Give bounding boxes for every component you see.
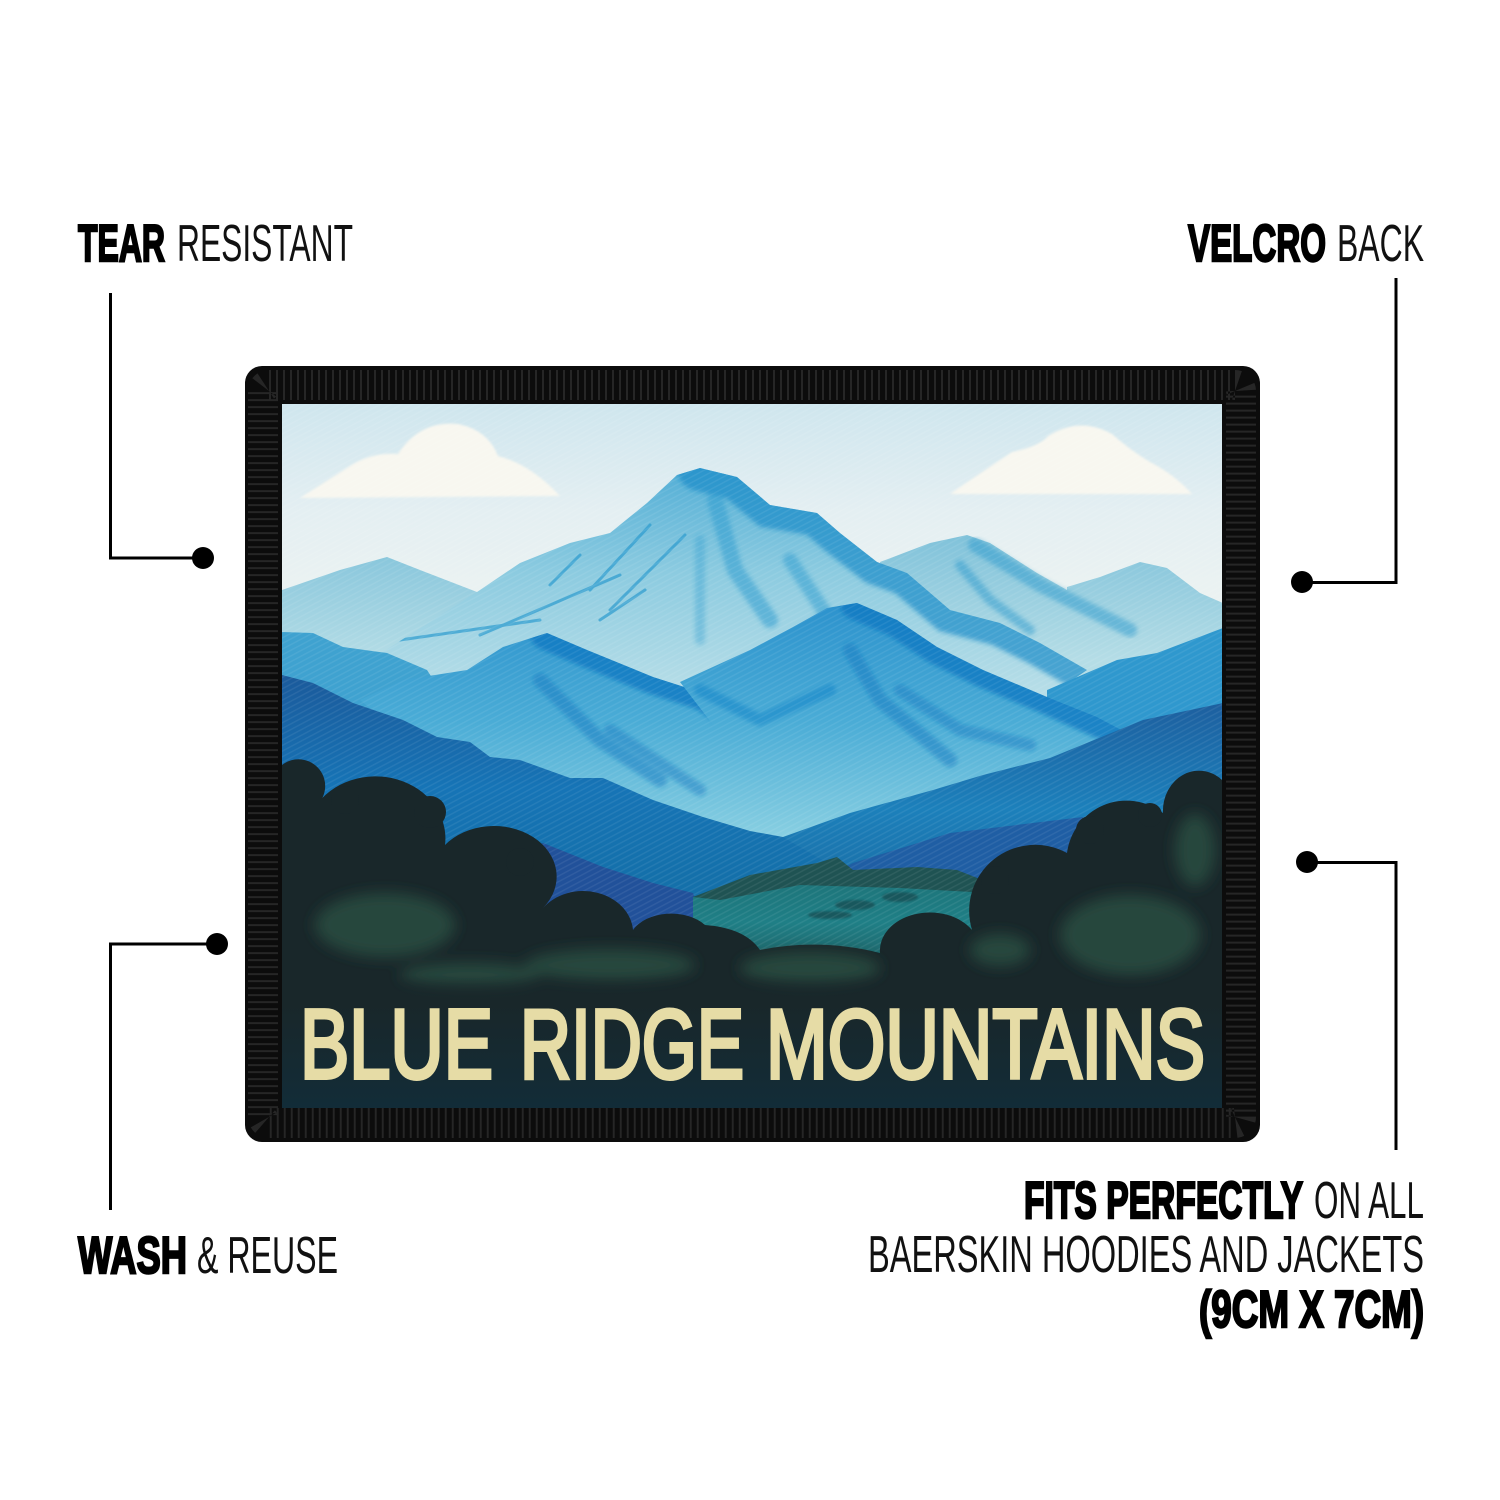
cloud right bbox=[950, 425, 1192, 494]
patch bbox=[245, 366, 1260, 1142]
label: FITS PERFECTLY bbox=[1024, 1172, 1303, 1230]
patch title: BLUE bbox=[300, 989, 493, 1099]
leader line bbox=[1302, 278, 1396, 582]
label: VELCRO bbox=[1188, 215, 1326, 273]
dot bbox=[1296, 851, 1318, 873]
patch title: MOUNTAINS bbox=[766, 989, 1205, 1099]
lower ridge right bbox=[848, 817, 1083, 878]
label: & REUSE bbox=[197, 1227, 338, 1285]
lower blue ridge bbox=[542, 843, 694, 930]
sky bbox=[282, 404, 1222, 603]
mountain base bbox=[282, 640, 1222, 940]
callout: tear resistant bbox=[78, 215, 353, 569]
dark ridge left bbox=[282, 675, 783, 896]
label: RESISTANT bbox=[177, 215, 353, 273]
label bbox=[78, 1227, 338, 1285]
middle mountain right bbox=[680, 603, 1120, 806]
valley shrubs bbox=[808, 892, 918, 919]
callout: fits perfectly bbox=[868, 851, 1424, 1339]
patch title: RIDGE bbox=[520, 989, 744, 1099]
forest bbox=[282, 759, 1224, 1010]
black merrowed border base bbox=[245, 366, 1260, 1142]
far mountain right bbox=[1067, 562, 1222, 647]
far mountain left bbox=[282, 557, 477, 652]
left middle ridge bbox=[282, 632, 431, 710]
label bbox=[868, 1172, 1424, 1339]
valley tree line bbox=[693, 857, 990, 900]
valley bbox=[693, 885, 972, 953]
middle right ridges bbox=[700, 603, 1127, 760]
forest highlights bbox=[315, 814, 1215, 987]
middle mountain left bbox=[376, 633, 783, 837]
label: TEAR bbox=[78, 215, 165, 273]
title bar bbox=[282, 1010, 1222, 1108]
leader line bbox=[110, 293, 203, 558]
far peak right shading bbox=[960, 545, 1130, 630]
label: ON ALL bbox=[1314, 1172, 1424, 1230]
label: WASH bbox=[78, 1227, 187, 1285]
patch artwork bbox=[282, 404, 1224, 1108]
dot bbox=[1291, 571, 1313, 593]
leader line bbox=[110, 944, 217, 1210]
far peak right bbox=[880, 535, 1067, 658]
stitched border bbox=[263, 385, 1241, 1123]
main peak ridges bbox=[400, 468, 1087, 670]
main peak bbox=[384, 468, 1020, 687]
callout: velcro back bbox=[1188, 215, 1424, 593]
callout: wash and reuse bbox=[78, 933, 338, 1285]
fabric twill bbox=[282, 469, 1222, 952]
dot bbox=[206, 933, 228, 955]
middle left ridges bbox=[529, 633, 709, 798]
cloud left bbox=[300, 424, 560, 498]
right middle ridge bbox=[1047, 628, 1222, 730]
leader line bbox=[1307, 862, 1396, 1150]
dot bbox=[192, 547, 214, 569]
label bbox=[78, 215, 353, 273]
patch title bbox=[300, 989, 1205, 1099]
dark ridge right bbox=[783, 703, 1222, 866]
label: BACK bbox=[1337, 215, 1424, 273]
